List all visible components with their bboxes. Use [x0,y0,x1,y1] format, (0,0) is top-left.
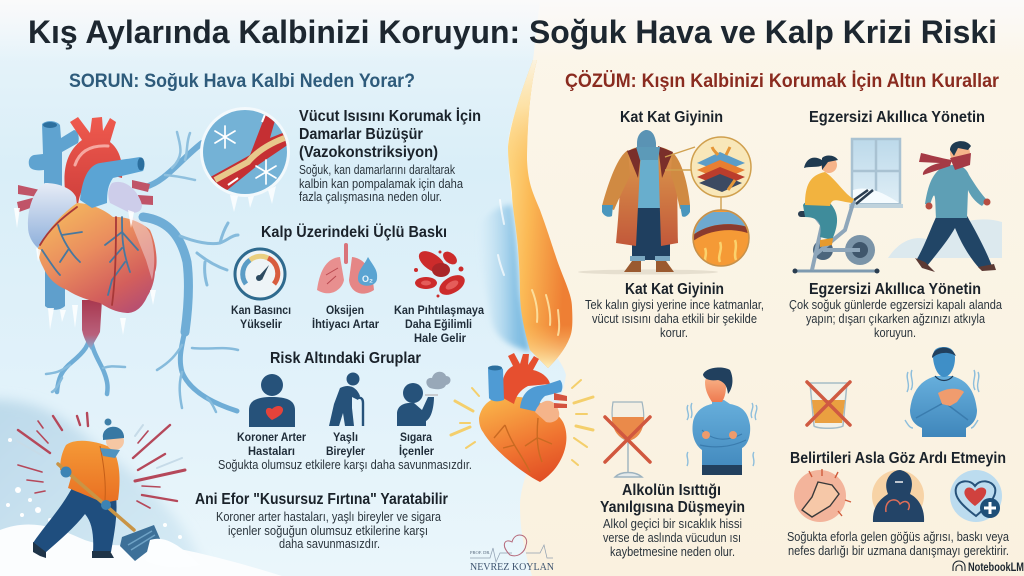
blue vena cava [29,121,79,190]
jacket [60,441,120,503]
labels: risk groups: Koroner Arter [237,432,306,444]
caption: Çok soğuk günlerde egzersizi kapalı alanda [789,298,1002,312]
effort streaks [17,413,185,508]
caption: Egzersizi Akıllıca Yönetin [809,281,981,298]
labels: triple pressure: İhtiyacı Artar [312,318,379,331]
flame and ice dividing ribbon [478,60,572,368]
text block: vasoconstriction: Vücut Isısını Korumak İçin [299,108,481,125]
icicles [14,208,156,335]
red stubs [17,180,153,212]
text block: sudden effort: Koroner arter hastaları, yaşlı bireyler ve sigara [216,510,441,524]
labels: risk groups: İçenler [399,445,434,458]
illustration: window with snow [849,139,903,208]
icon: narrowed artery in icy circle [200,107,298,212]
section: alcohol myth [600,368,757,559]
shovel [58,464,134,530]
illustration: man walking with scarf [915,141,996,272]
caption: Alkolün Isıttığı [622,482,721,499]
heading: risk groups: Risk Altındaki Gruplar [270,350,421,367]
icon: hand with pain [794,469,851,522]
labels: risk groups: Bireyler [326,446,365,458]
caption: koruyun. [874,326,916,340]
descending trunk [82,300,102,350]
subheading: Egzersizi Akıllıca Yönetin [809,109,985,126]
labels: triple pressure: Yükselir [240,319,282,331]
labels: risk groups: Sıgara [400,432,433,444]
left atrium [28,183,77,248]
caption [787,530,1009,558]
right atrium [108,182,142,213]
icon: heat retained under layers [693,210,750,266]
text block: vasoconstriction: fazla çalışmasına neden olur. [299,190,442,204]
section: dress in layers [578,109,764,340]
title: Kış Aylarında Kalbinizi Koruyun: Soğuk Hava ve Kalp Krizi Riski [28,14,997,50]
labels: triple pressure [231,305,485,345]
icon: crossed-out whisky glass [807,382,850,428]
illustration: person in layered coat [578,130,718,274]
icon: elderly person [329,372,363,426]
text block: sudden effort: daha savunmasızdır. [279,537,380,551]
heading: triple pressure: Kalp Üzerindeki Üçlü Baskı [261,224,447,241]
illustration: man with chest pain [905,347,979,437]
caption [789,281,1002,340]
logo: Nevrez Koylan: PROF. DR. [470,550,491,555]
scarf [100,448,120,458]
labels: triple pressure: Hale Gelir [414,333,466,345]
snow hill [0,400,200,576]
aorta [64,117,122,205]
labels: triple pressure: Kan Basıncı [231,305,291,317]
caption: Yanılgısına Düşmeyin [600,499,745,516]
icy vessels [46,132,238,412]
caption: Tek kalın giysi yerine ince katmanlar, [585,298,764,312]
subheading: Belirtileri Asla Göz Ardı Etmeyin [790,450,1006,467]
coronary vessels [40,207,138,305]
illustration: warm heart with rays [451,353,593,482]
caption: Kat Kat Giyinin [625,281,724,298]
caption: korur. [660,326,688,340]
icon: crossed-out wine glass [605,402,650,477]
boots [33,542,114,558]
icon: blood pressure gauge [235,249,285,299]
head and hat [106,432,124,450]
text block: vasoconstriction: Soğuk, kan damarlarını daraltarak [299,163,456,177]
caption [600,482,745,559]
legs [33,488,117,553]
icon: coronary patient [249,374,295,427]
labels: triple pressure: Oksijen [326,305,364,317]
icon: person with chest pain [872,470,924,522]
text block: vasoconstriction: (Vazokonstriksiyon) [299,144,438,161]
labels: risk groups: Hastaları [248,446,295,458]
text block: sudden effort: içenler soğuğun olumsuz etkilerine karşı [228,524,428,538]
caption: Alkol geçici bir sıcaklık hissi [603,517,742,531]
section: do not ignore symptoms [787,347,1009,558]
pulmonary artery [80,157,144,208]
snow pile [145,539,200,567]
snowflakes [6,438,182,539]
caption: vücut ısısını daha etkili bir şekilde [592,312,757,326]
icon: fabric layers [691,137,751,197]
icon: heart with plus [950,470,1002,522]
illustration: shivering man [687,368,757,475]
caption: yapın; dışarı çıkarken ağzınızı atkıyla [806,312,985,326]
illustration: woman on exercise bike [792,156,880,274]
text block: vasoconstriction: Damarlar Büzüşür [299,126,423,143]
text block: sudden effort: Ani Efor "Kusursuz Fırtına" Yaratabilir [195,491,448,508]
caption: kaybetmesine neden olur. [610,545,735,559]
snow ground [0,524,282,576]
caption: verse de aslında vücudun ısı [603,531,741,545]
labels: triple pressure: Kan Pıhtılaşmaya [394,305,485,317]
connector lines [665,147,721,211]
text block: sudden effort [195,491,448,551]
labels: triple pressure: Daha Eğilimli [405,319,472,331]
heading: problem: SORUN: Soğuk Hava Kalbi Neden Yorar? [69,70,415,92]
ventricle [38,203,157,313]
illustration: snow hill behind walker [888,219,1002,258]
logo: Nevrez Koylan: NEVREZ KOYLAN [470,561,554,573]
text block: vasoconstriction: kalbin kan pompalamak için daha [299,177,463,191]
logo: Nevrez Koylan [470,535,554,573]
icon: clotting blood cells [414,247,468,299]
illustration: frozen heart with icy vessels [14,117,238,412]
icon: smoker [397,372,450,426]
subheading: Kat Kat Giyinin [620,109,723,126]
icon: lungs with oxygen drop [317,245,377,294]
icon: lungs with oxygen drop: O₂ [362,274,373,284]
text block: vasoconstriction [299,108,481,204]
labels: risk groups: Yaşlı [333,432,358,444]
labels: risk groups [218,432,472,472]
section: exercise wisely [789,109,1002,340]
illustration: man shoveling snow [0,400,282,576]
caption [585,281,764,340]
heading: solution: ÇÖZÜM: Kışın Kalbinizi Korumak İçin Altın Kurallar [565,69,999,92]
lower blue vessel stump [45,270,65,310]
gloves [60,466,72,478]
labels: risk groups: Soğukta olumsuz etkilere karşı daha savunmasızdır. [218,458,472,472]
